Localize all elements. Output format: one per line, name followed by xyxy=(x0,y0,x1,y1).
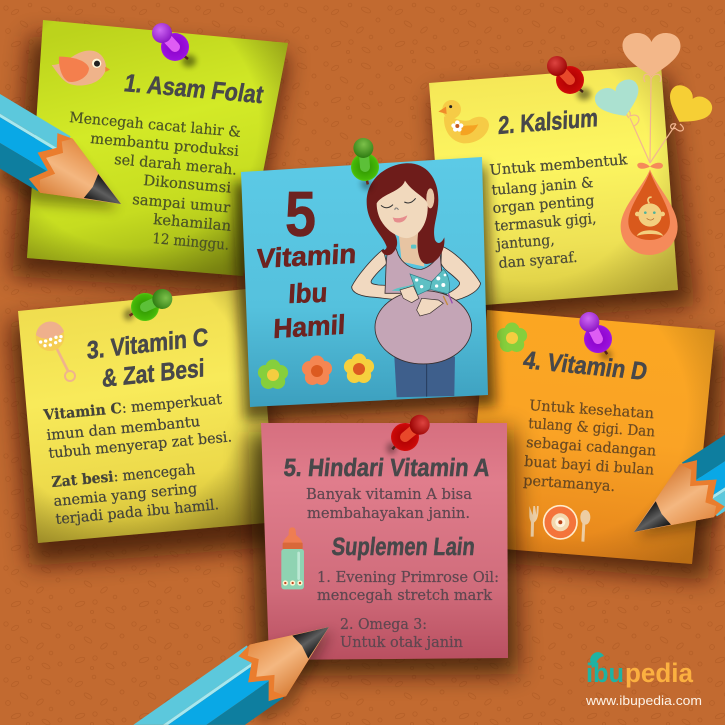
text block: Vitamin C and zat besi description: anemia yang sering xyxy=(53,481,198,510)
panel: center title 5 Vitamin Ibu Hamil xyxy=(232,157,496,420)
text block: Vitamin D description xyxy=(523,398,657,495)
panel: 2 Kalsium xyxy=(429,65,695,324)
pin: red, note 2 xyxy=(547,56,591,100)
heading: 4. Vitamin D: 4. Vitamin D xyxy=(521,346,650,386)
pencil: top left xyxy=(0,94,137,242)
text block: Asam Folat description: sampai umur xyxy=(132,192,231,217)
text block: vitamin A warning: Banyak vitamin A bisa xyxy=(306,487,472,503)
strings xyxy=(626,74,683,163)
panel: 4 Vitamin D xyxy=(466,310,724,580)
pin: green, note 3 xyxy=(122,280,175,332)
text block: Kalsium description: tulang janin & xyxy=(491,175,594,199)
text block: Kalsium description xyxy=(489,152,628,272)
logo: ibupedia xyxy=(585,652,702,708)
text block: Asam Folat description: Mencegah cacat lahir & xyxy=(69,110,241,141)
jeans xyxy=(394,357,455,397)
logo: ibupedia: pedia xyxy=(625,658,694,688)
illustration: pregnant mother xyxy=(352,163,481,397)
baby in sling xyxy=(621,163,678,255)
title: 5 Vitamin Ibu Hamil: 5 xyxy=(285,178,316,250)
heart balloon: teal xyxy=(592,76,646,124)
text block: Vitamin D description: buat bayi di bulan xyxy=(524,454,655,479)
icon: baby bottle xyxy=(281,527,304,589)
text block: Asam Folat description: sel darah merah. xyxy=(114,152,238,179)
panel: 3 Vitamin C & Zat Besi xyxy=(10,288,282,566)
heading: 3. Vitamin C & Zat Besi xyxy=(87,323,208,393)
heart balloon: peach xyxy=(622,33,680,76)
hands xyxy=(400,286,443,316)
title: 5 Vitamin Ibu Hamil: Ibu xyxy=(288,278,328,309)
title: 5 Vitamin Ibu Hamil: Hamil xyxy=(273,309,346,344)
pin: green, center note xyxy=(336,134,394,192)
text block: other supplements: 1. Evening Primrose Oil: xyxy=(317,570,499,586)
logo: ibupedia: ibu xyxy=(586,658,624,688)
text block: Asam Folat description xyxy=(69,110,241,254)
heading: Suplemen Lain: Suplemen Lain xyxy=(330,533,476,561)
text block: other supplements: Untuk otak janin xyxy=(340,635,463,651)
text block: Vitamin C and zat besi description: terjadi pada ibu hamil. xyxy=(55,497,220,528)
heading: 5. Hindari Vitamin A: 5. Hindari Vitamin A xyxy=(282,454,491,482)
text block: Kalsium description: jantung, xyxy=(494,232,555,253)
heading: 2. Kalsium: 2. Kalsium xyxy=(498,104,598,140)
text block: Asam Folat description: Dikonsumsi xyxy=(143,173,232,197)
pencil: bottom xyxy=(133,627,332,725)
icon: rattle xyxy=(36,322,75,381)
face xyxy=(377,181,434,249)
logo: ibupedia: www.ibupedia.com xyxy=(585,693,702,708)
heading: 1. Asam Folat: 1. Asam Folat xyxy=(122,69,266,109)
pin: purple, note 1 xyxy=(152,23,196,67)
heading: 3. Vitamin C & Zat Besi: & Zat Besi xyxy=(102,354,204,393)
text block: Kalsium description: dan syaraf. xyxy=(498,250,578,272)
heart balloon: yellow xyxy=(660,82,716,133)
text block: Kalsium description: termasuk gigi, xyxy=(494,211,597,235)
text block: Vitamin C and zat besi description: Zat besi: mencegah xyxy=(51,461,196,491)
text block: Vitamin D description: sebagai cadangan xyxy=(526,435,657,460)
pin: red, note 5 xyxy=(386,413,430,456)
text block: Vitamin C and zat besi description: imun dan membantu xyxy=(46,414,201,444)
text block: Vitamin D description: tulang & gigi. Dan xyxy=(528,416,656,440)
neck xyxy=(398,230,424,267)
bow xyxy=(392,269,450,295)
panel: 5 Hindari Vitamin A xyxy=(248,423,518,676)
text block: other supplements: mencegah stretch mark xyxy=(317,588,492,604)
title: 5 Vitamin Ibu Hamil: Vitamin xyxy=(256,238,357,274)
arms xyxy=(352,246,481,313)
pencil: right xyxy=(617,435,725,566)
text block: Vitamin C and zat besi description xyxy=(42,391,233,528)
icon: plate, fork and spoon xyxy=(529,506,590,542)
bracelets xyxy=(443,293,452,305)
panel: 1 Asam Folat xyxy=(12,20,288,292)
text block: Kalsium description: organ penting xyxy=(492,193,595,217)
text block: Asam Folat description: 12 minggu. xyxy=(152,231,230,254)
heading: 3. Vitamin C & Zat Besi: 3. Vitamin C xyxy=(87,323,208,365)
top and belly xyxy=(375,243,472,364)
text block: Vitamin C and zat besi description: Vitamin C: memperkuat xyxy=(42,391,223,424)
text block: Vitamin D description: pertamanya. xyxy=(523,473,616,495)
text block: other supplements: 2. Omega 3: xyxy=(340,617,427,633)
text block: Asam Folat description: kehamilan xyxy=(153,212,232,235)
pin: purple, note 4 xyxy=(571,310,622,361)
text block: Vitamin C and zat besi description: tubuh menyerap zat besi. xyxy=(48,429,233,462)
text block: Kalsium description: Untuk membentuk xyxy=(489,152,628,179)
icon: bird xyxy=(52,51,110,86)
text block: other supplements xyxy=(317,570,499,651)
text block: Vitamin D description: Untuk kesehatan xyxy=(529,398,655,422)
text block: vitamin A warning xyxy=(306,487,472,522)
text block: vitamin A warning: membahayakan janin. xyxy=(307,506,470,522)
hair xyxy=(367,163,444,264)
icon: balloons with baby xyxy=(592,33,716,255)
title: 5 Vitamin Ibu Hamil xyxy=(256,178,357,344)
icon: flowers xyxy=(258,354,374,389)
icon: duck xyxy=(438,100,489,143)
icon: green flower xyxy=(497,322,527,352)
text block: Asam Folat description: membantu produksi xyxy=(90,131,240,160)
